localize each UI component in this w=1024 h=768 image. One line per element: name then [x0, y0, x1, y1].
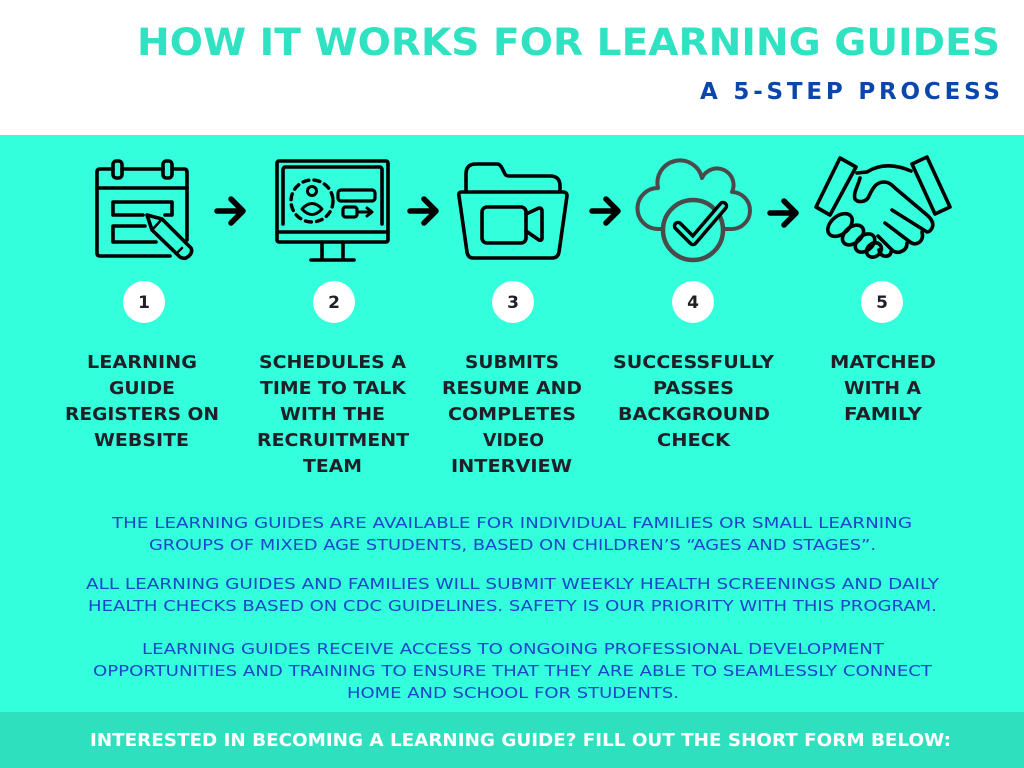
title: HOW IT WORKS FOR LEARNING GUIDES	[137, 21, 1000, 64]
arrow 4	[770, 201, 796, 225]
paragraph: health: HEALTH CHECKS BASED ON CDC GUIDELINES. SAFETY IS OUR PRIORITY WITH THIS PROGRAM.	[88, 597, 937, 615]
step 4 text: PASSES	[653, 378, 734, 399]
step 3 text: RESUME AND	[442, 378, 582, 399]
step 2 text	[257, 352, 410, 477]
step 3 number: 3	[507, 293, 519, 313]
paragraph: health: ALL LEARNING GUIDES AND FAMILIES WILL SUBMIT WEEKLY HEALTH SCREENINGS AND DAILY	[86, 575, 940, 593]
arrow 1	[217, 199, 243, 223]
paragraph: professional development: LEARNING GUIDES RECEIVE ACCESS TO ONGOING PROFESSIONAL DEVELOPMENT	[142, 640, 885, 658]
step 2 text: RECRUITMENT	[257, 430, 410, 451]
paragraph: availability: THE LEARNING GUIDES ARE AVAILABLE FOR INDIVIDUAL FAMILIES OR SMALL LEARNING	[111, 514, 912, 532]
step 4 number	[672, 281, 714, 323]
step 4 text: SUCCESSFULLY	[613, 352, 775, 373]
step 5 number: 5	[876, 293, 888, 313]
step 4 text: BACKGROUND	[618, 404, 770, 425]
step 3 text: COMPLETES	[448, 404, 576, 425]
step 5 number	[861, 281, 903, 323]
arrow 3	[592, 199, 618, 223]
step 3 text: INTERVIEW	[451, 456, 572, 477]
step 1 number: 1	[138, 293, 150, 313]
step 3 text	[442, 352, 582, 477]
step 1 text: WEBSITE	[94, 430, 189, 451]
icon: handshake	[816, 157, 950, 260]
paragraph: health	[86, 575, 940, 615]
step 1 text: REGISTERS ON	[65, 404, 219, 425]
icon: cloud with checkmark	[638, 160, 750, 260]
step 3 number	[492, 281, 534, 323]
paragraph: professional development: OPPORTUNITIES AND TRAINING TO ENSURE THAT THEY ARE ABLE TO SEAMLESSLY CONNECT	[93, 662, 933, 680]
paragraph: availability: GROUPS OF MIXED AGE STUDENTS, BASED ON CHILDREN’S “AGES AND STAGES”.	[149, 536, 876, 554]
step 5 text: WITH A	[844, 378, 921, 399]
step 2 text: WITH THE	[280, 404, 385, 425]
subtitle: A 5-STEP PROCESS	[700, 79, 1000, 105]
call to action: INTERESTED IN BECOMING A LEARNING GUIDE? FILL OUT THE SHORT FORM BELOW:	[90, 731, 951, 751]
header panel	[0, 0, 1024, 135]
footer band	[0, 712, 1024, 768]
step 3 text: VIDEO	[483, 430, 544, 451]
step 3 text: SUBMITS	[465, 352, 559, 373]
step 2 text: SCHEDULES A	[259, 352, 406, 373]
icon: folder with video camera	[459, 164, 567, 258]
step 4 number: 4	[687, 293, 699, 313]
step 1 text	[65, 352, 219, 451]
paragraph: professional development	[93, 640, 933, 702]
step 2 text: TIME TO TALK	[260, 378, 407, 399]
step 4 text	[613, 352, 775, 451]
step 1 number	[123, 281, 165, 323]
step 5 text: MATCHED	[830, 352, 936, 373]
step 2 number	[313, 281, 355, 323]
icon: monitor with profile	[277, 161, 388, 260]
step 2 number: 2	[328, 293, 340, 313]
step 2 text: TEAM	[303, 456, 362, 477]
paragraph: availability	[111, 514, 912, 554]
step 1 text: LEARNING	[87, 352, 197, 373]
step 5 text	[830, 352, 936, 425]
arrow 2	[410, 199, 436, 223]
icon: calendar with pencil	[97, 161, 192, 258]
step 5 text: FAMILY	[844, 404, 923, 425]
paragraph: professional development: HOME AND SCHOOL FOR STUDENTS.	[347, 684, 679, 702]
step 4 text: CHECK	[657, 430, 731, 451]
step 1 text: GUIDE	[109, 378, 175, 399]
